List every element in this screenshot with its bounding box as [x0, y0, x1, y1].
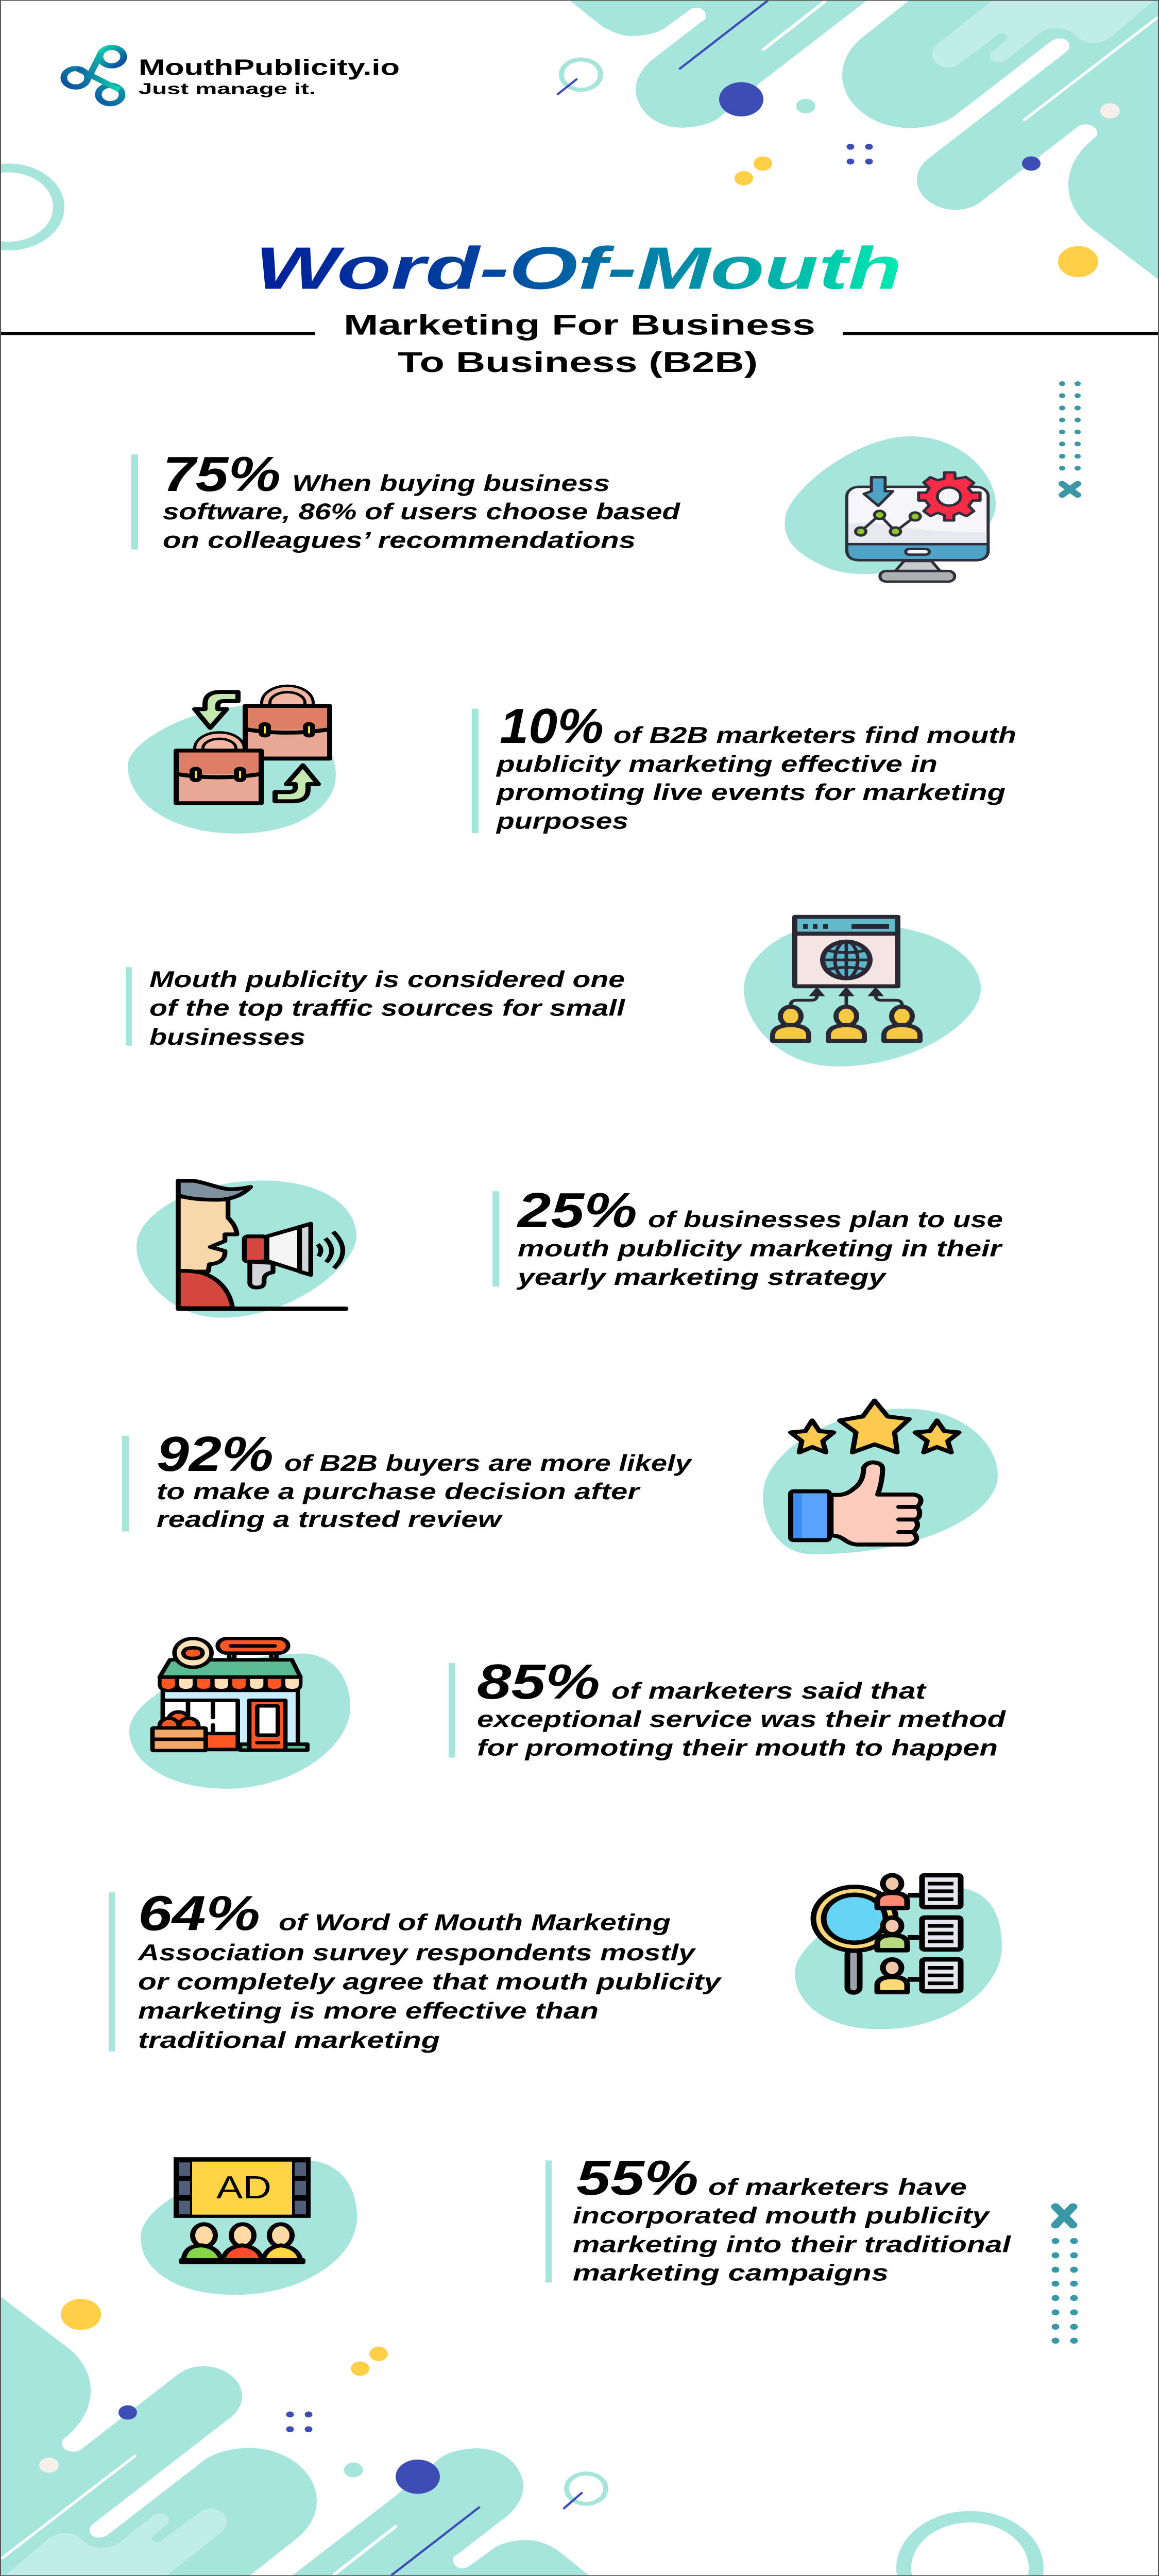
stat text 64%: Association survey respondents mostly: [137, 1940, 696, 1965]
logo: [64, 47, 400, 104]
stat text 10%: publicity marketing effective in: [496, 751, 938, 776]
dots and cross: lower right: [1052, 2207, 1078, 2344]
icon: shop front: [129, 1638, 350, 1789]
background shapes: bottom left: [0, 2296, 1044, 2576]
stat text 10%: of B2B marketers find mouth: [613, 722, 1016, 748]
stat text 92%: of B2B buyers are more likely: [284, 1450, 693, 1476]
stat text traffic sources: businesses: [149, 1024, 305, 1050]
stat text 92%: to make a purchase decision after: [157, 1479, 641, 1504]
stat text 55%: of marketers have: [708, 2174, 967, 2199]
stat text 75%: 75%: [163, 447, 281, 502]
dots and cross: upper right: [1059, 381, 1081, 495]
stat text 85%: of marketers said that: [611, 1678, 927, 1703]
panel: stat 85%: [129, 1638, 1006, 1789]
icon: person with megaphone: [137, 1180, 356, 1318]
stat text 55%: [573, 2150, 1012, 2285]
title: Word-Of-Mouth: [255, 235, 902, 302]
stat text 64%: [137, 1886, 722, 2053]
logo mark: [64, 47, 124, 104]
icon: audience watching an ad: [141, 2157, 357, 2295]
stat text 85%: [477, 1654, 1006, 1760]
stat text 55%: marketing into their traditional: [573, 2232, 1012, 2257]
stat text traffic sources: [149, 967, 626, 1050]
stat text traffic sources: Mouth publicity is considered one: [149, 967, 625, 992]
stat text 64%: traditional marketing: [138, 2027, 440, 2053]
panel: traffic sources: [126, 917, 981, 1066]
stat text 75%: [163, 447, 680, 553]
stat text 75%: When buying business: [292, 470, 610, 496]
panel: stat 55%: [141, 2150, 1012, 2295]
stat text 64%: or completely agree that mouth publicity: [138, 1969, 722, 1994]
stat text 25%: [516, 1183, 1003, 1290]
icon: website traffic: [744, 917, 981, 1066]
icon: magnifier with people and records: [795, 1875, 1002, 2029]
stat text 92%: reading a trusted review: [157, 1506, 503, 1532]
stat text 75%: software, 86% of users choose based: [163, 499, 680, 524]
icon: swapping briefcases: [128, 689, 336, 834]
stat text 10%: 10%: [500, 699, 604, 754]
stat text 64%: marketing is more effective than: [138, 1998, 599, 2023]
stat text 55%: 55%: [576, 2150, 698, 2206]
stat text 25%: of businesses plan to use: [648, 1207, 1003, 1232]
subtitle: To Business (B2B): [398, 346, 758, 378]
stat text 55%: incorporated mouth publicity: [573, 2203, 991, 2228]
stat text 85%: for promoting their mouth to happen: [477, 1735, 998, 1760]
stat text 85%: exceptional service was their method: [477, 1706, 1006, 1732]
panel: stat 10%: [128, 689, 1016, 834]
stat text 64%: of Word of Mouth Marketing: [279, 1910, 671, 1935]
panel: stat 75%: [131, 436, 996, 582]
stat text 10%: [496, 699, 1016, 834]
icon: monitor with gear: [785, 436, 996, 582]
stat text 25%: mouth publicity marketing in their: [518, 1236, 1003, 1261]
stat text 10%: purposes: [496, 808, 628, 834]
stat text 25%: yearly marketing strategy: [516, 1264, 887, 1290]
stat text 85%: 85%: [477, 1654, 600, 1709]
logo tagline: Just manage it.: [139, 80, 316, 98]
panel: stat 92%: [122, 1400, 998, 1554]
icon: thumbs up with stars: [763, 1400, 998, 1554]
stat text 64%: 64%: [138, 1886, 260, 1941]
stat text 55%: marketing campaigns: [573, 2260, 889, 2285]
icon: audience watching an ad: AD: [216, 2170, 271, 2206]
stat text traffic sources: of the top traffic sources for small: [149, 995, 626, 1021]
stat text 92%: [157, 1427, 693, 1532]
subtitle: [0, 309, 1159, 378]
panel: stat 64%: [109, 1875, 1002, 2053]
background shapes: top right: [0, 0, 1159, 280]
stat text 10%: promoting live events for marketing: [496, 779, 1005, 805]
stat text 25%: 25%: [517, 1183, 637, 1238]
stat text 92%: 92%: [157, 1427, 274, 1482]
stat text 75%: on colleagues’ recommendations: [163, 528, 636, 553]
panel: stat 25%: [137, 1180, 1003, 1318]
subtitle: Marketing For Business: [344, 309, 815, 341]
logo name: MouthPublicity.io: [139, 55, 400, 80]
